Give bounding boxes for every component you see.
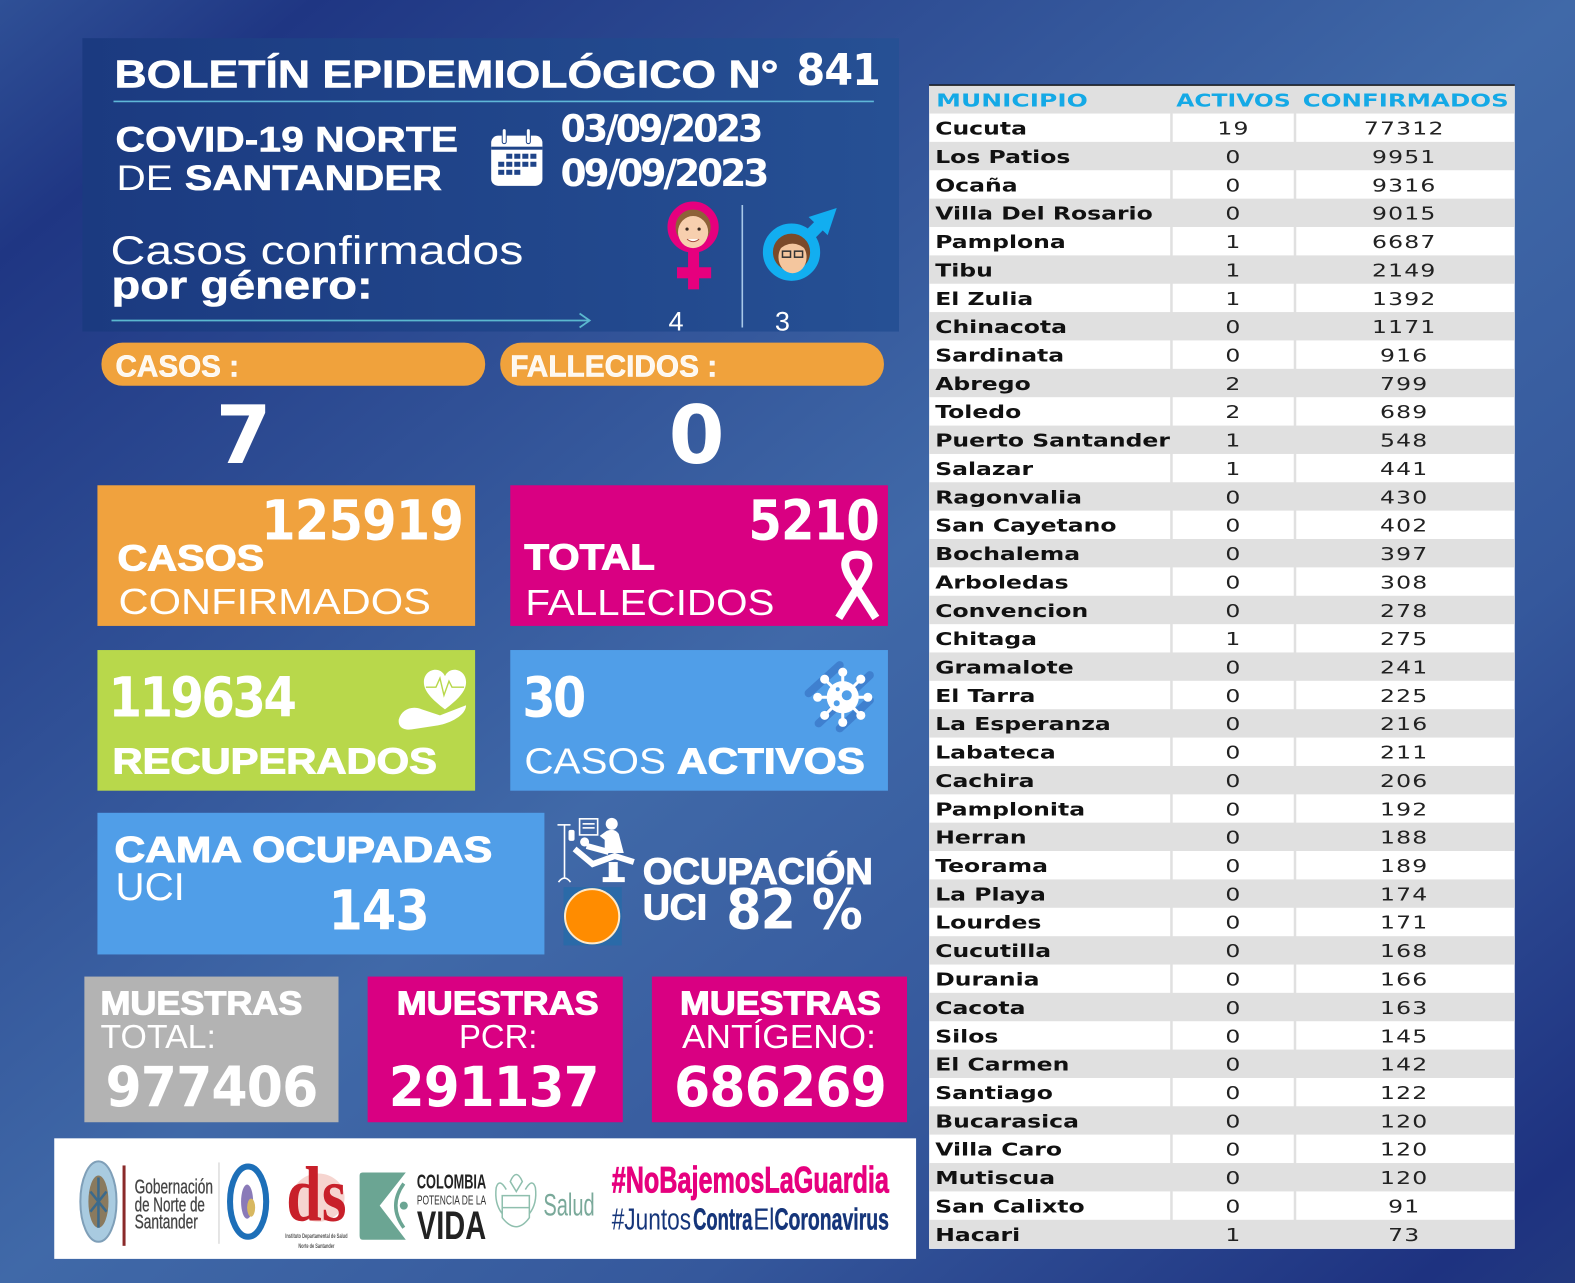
hashtag: juntos contra el coronavirus: [612, 1204, 889, 1237]
table rows: 0: [1225, 147, 1242, 167]
card: muestras antigeno: 686269: [674, 1056, 886, 1120]
ICU occupancy: 82 %: [726, 878, 862, 942]
logo: colombia potencia de la vida: POTENCIA DE LA: [417, 1193, 486, 1208]
table rows: Chitaga: [935, 629, 1037, 649]
table rows: 241: [1380, 657, 1428, 678]
logo: gobernacion: Gobernación: [135, 1177, 213, 1199]
card: total fallecidos: 5210: [748, 490, 879, 554]
table rows: 0: [1225, 317, 1242, 337]
hashtag: juntos contra el coronavirus: Contra: [693, 1204, 752, 1237]
table rows: 0: [1225, 969, 1242, 990]
table rows: 0: [1225, 1026, 1242, 1047]
table rows: 142: [1380, 1054, 1428, 1075]
table rows: San Calixto: [935, 1196, 1085, 1217]
number: fallecidos: 0: [669, 388, 724, 482]
pill: casos: [101, 343, 485, 386]
table rows: 0: [1225, 1196, 1242, 1217]
table rows: Hacari: [935, 1224, 1020, 1245]
table rows: 275: [1380, 629, 1428, 649]
icon: calendar: [491, 129, 542, 186]
table rows: 163: [1380, 997, 1428, 1018]
logo: salud: Salud: [543, 1188, 595, 1223]
table rows: Labateca: [935, 742, 1056, 763]
table rows: Cachira: [935, 771, 1034, 791]
table rows: 278: [1380, 600, 1428, 621]
table rows: 120: [1380, 1111, 1428, 1132]
logo: coat of arms: [496, 1174, 536, 1227]
table rows: Pamplonita: [935, 799, 1085, 820]
card: camas ocupadas: 143: [328, 879, 429, 943]
card: muestras PCR: MUESTRAS: [397, 986, 599, 1023]
card: muestras PCR: PCR:: [459, 1019, 537, 1056]
card: muestras PCR: 291137: [389, 1056, 599, 1120]
panel: header: [82, 38, 899, 337]
table rows: Santiago: [935, 1083, 1053, 1103]
gender heading: Casos confirmados: [110, 228, 523, 273]
logo strip: [54, 1138, 916, 1259]
table rows: 0: [1225, 771, 1242, 791]
divider: [741, 205, 743, 328]
table rows: 0: [1225, 1111, 1242, 1132]
card: camas ocupadas: CAMA OCUPADAS: [115, 829, 492, 870]
table rows: 0: [1225, 799, 1242, 820]
card: total fallecidos: FALLECIDOS: [525, 582, 774, 623]
table rows: 0: [1225, 657, 1242, 678]
table rows: 0: [1225, 884, 1242, 905]
table rows: 0: [1225, 544, 1242, 564]
table rows: 0: [1225, 1168, 1242, 1188]
table rows: La Esperanza: [935, 714, 1111, 735]
table rows: 397: [1380, 544, 1428, 564]
card: casos confirmados: 125919: [261, 490, 463, 554]
table rows: Convencion: [935, 600, 1088, 621]
pill: casos: CASOS :: [116, 351, 239, 384]
table rows: 19: [1217, 118, 1250, 139]
table rows: 73: [1388, 1224, 1420, 1245]
table rows: 120: [1380, 1139, 1428, 1160]
dates: 03/09/2023: [560, 108, 761, 151]
table rows: [935, 118, 1445, 1245]
table header: MUNICIPIO: [936, 90, 1088, 111]
number: casos: 7: [216, 388, 271, 482]
logo: gobernacion: de Norte de: [135, 1195, 205, 1217]
table rows: 2: [1225, 374, 1242, 394]
card: casos activos: [510, 650, 888, 791]
table rows: 0: [1225, 345, 1242, 366]
table rows: 689: [1380, 402, 1428, 423]
table rows: 120: [1380, 1168, 1428, 1188]
table rows: La Playa: [935, 884, 1046, 905]
table rows: Tibu: [935, 260, 993, 281]
card: casos activos: CASOS: [524, 741, 666, 782]
table rows: Bochalema: [935, 544, 1080, 564]
table rows: 1: [1225, 1224, 1242, 1245]
table rows: 0: [1225, 1054, 1242, 1075]
icon: female: [671, 205, 715, 289]
table rows: 1: [1225, 430, 1242, 451]
table rows: 1392: [1372, 288, 1437, 309]
logo: colombia mark: [360, 1172, 408, 1240]
dates: 09/09/2023: [560, 152, 767, 195]
logo: shield: [80, 1161, 126, 1246]
card: total fallecidos: [510, 485, 888, 626]
gender heading: [110, 228, 523, 307]
table rows: 171: [1380, 912, 1428, 933]
logo: gobernacion: Santander: [135, 1212, 198, 1234]
icon: ICU bed: [557, 818, 634, 882]
table rows: 2: [1225, 402, 1242, 423]
hashtag: juntos contra el coronavirus: El: [753, 1204, 774, 1237]
ICU occupancy: OCUPACIÓN: [643, 850, 873, 892]
table rows: 9951: [1372, 147, 1437, 167]
table rows: 168: [1380, 941, 1428, 961]
card: total fallecidos: TOTAL: [524, 537, 655, 578]
table rows: 188: [1380, 827, 1428, 848]
hashtag: juntos contra el coronavirus: #Juntos: [612, 1204, 691, 1237]
table rows: 441: [1380, 459, 1428, 479]
table rows: Villa Caro: [935, 1139, 1062, 1160]
table rows: 0: [1225, 1139, 1242, 1160]
table rows: 1171: [1372, 317, 1437, 337]
table rows: San Cayetano: [935, 515, 1117, 536]
table header: CONFIRMADOS: [1303, 90, 1509, 111]
card: muestras total: [84, 977, 339, 1122]
logo: colombia potencia de la vida: VIDA: [417, 1203, 486, 1248]
card: recuperados: [97, 650, 475, 791]
table rows: 0: [1225, 685, 1242, 706]
table rows: 216: [1380, 714, 1428, 735]
icon: virus: [809, 665, 872, 728]
table rows: Ocaña: [935, 175, 1018, 196]
table rows: Cucutilla: [935, 941, 1051, 961]
table rows: 402: [1380, 515, 1428, 536]
table rows: Chinacota: [935, 317, 1067, 337]
table rows: Mutiscua: [935, 1168, 1055, 1188]
card: casos confirmados: CASOS: [118, 538, 264, 579]
subtitle: SANTANDER: [185, 159, 442, 198]
subtitle: COVID-19 NORTE: [116, 121, 458, 160]
table rows: Toledo: [935, 402, 1021, 423]
card: casos confirmados: CONFIRMADOS: [119, 581, 431, 622]
card: recuperados: 119634: [108, 666, 295, 730]
table rows: Herran: [935, 827, 1027, 848]
table rows: El Zulia: [935, 288, 1033, 309]
table rows: 0: [1225, 912, 1242, 933]
card: muestras total: MUESTRAS: [100, 986, 302, 1023]
table rows: 1: [1225, 260, 1242, 281]
table rows: El Tarra: [935, 685, 1035, 706]
table rows: 0: [1225, 997, 1242, 1018]
table rows: Durania: [935, 969, 1040, 990]
table rows: Los Patios: [935, 147, 1070, 167]
female count: 4: [668, 306, 684, 337]
table rows: 206: [1380, 771, 1428, 791]
table rows: 0: [1225, 941, 1242, 961]
table rows: 799: [1380, 374, 1428, 394]
table rows: 0: [1225, 714, 1242, 735]
table rows: Arboledas: [935, 572, 1069, 593]
table rows: 9316: [1372, 175, 1437, 196]
table rows: 145: [1380, 1026, 1428, 1047]
table rows: 548: [1380, 430, 1428, 451]
table rows: 1: [1225, 459, 1242, 479]
table rows: 192: [1380, 799, 1428, 820]
table rows: 0: [1225, 175, 1242, 196]
table rows: 0: [1225, 515, 1242, 536]
table rows: 1: [1225, 288, 1242, 309]
traffic light: orange: [564, 887, 622, 945]
table rows: Silos: [935, 1026, 998, 1047]
table rows: 6687: [1372, 232, 1437, 252]
card: recuperados: RECUPERADOS: [113, 741, 437, 782]
table rows: 0: [1225, 572, 1242, 593]
table rows: 1: [1225, 629, 1242, 649]
table rows: 916: [1380, 345, 1428, 366]
table rows: 0: [1225, 203, 1242, 224]
card: casos confirmados: [97, 485, 475, 626]
table rows: 225: [1380, 685, 1428, 706]
table rows: 122: [1380, 1083, 1428, 1103]
table rows: 0: [1225, 742, 1242, 763]
table header: ACTIVOS: [1176, 90, 1291, 111]
ICU occupancy: [643, 850, 873, 942]
table rows: 166: [1380, 969, 1428, 990]
table rows: 430: [1380, 487, 1428, 508]
logo: colombia potencia de la vida: [417, 1172, 486, 1248]
hashtag: no bajemos la guardia: #NoBajemosLaGuardia: [612, 1159, 889, 1201]
table rows: 211: [1380, 742, 1428, 763]
table rows: 174: [1380, 884, 1428, 905]
table rows: Cacota: [935, 997, 1026, 1018]
table rows: Lourdes: [935, 912, 1041, 933]
card: muestras antigeno: MUESTRAS: [680, 986, 881, 1023]
table rows: Pamplona: [935, 232, 1066, 252]
logo: gobernacion: [135, 1177, 213, 1234]
table rows: Abrego: [935, 374, 1031, 394]
table: municipios: [929, 84, 1515, 1249]
table rows: 91: [1388, 1196, 1420, 1217]
logo: ids: ds: [286, 1151, 347, 1238]
table rows: 0: [1225, 600, 1242, 621]
card: camas ocupadas: [97, 813, 544, 954]
icon: heart in hand: [399, 670, 466, 730]
hashtag: juntos contra el coronavirus: Coronavirus: [774, 1204, 889, 1237]
title: BOLETÍN EPIDEMIOLÓGICO N°: [115, 52, 778, 96]
card: muestras total: TOTAL:: [100, 1019, 216, 1056]
logo: colombia potencia de la vida: COLOMBIA: [417, 1172, 486, 1194]
table rows: 0: [1225, 1083, 1242, 1103]
gender heading: por género:: [111, 264, 373, 307]
subtitle: [116, 121, 458, 198]
card: camas ocupadas: UCI: [116, 866, 185, 909]
table rows: Puerto Santander: [935, 430, 1171, 451]
table rows: Villa Del Rosario: [935, 203, 1153, 224]
table rows: El Carmen: [935, 1054, 1069, 1075]
card: muestras PCR: [368, 977, 623, 1122]
card: casos activos: 30: [522, 666, 584, 730]
table rows: Ragonvalia: [935, 487, 1082, 508]
arrow: [111, 313, 590, 328]
pill: fallecidos: [500, 343, 884, 386]
logo: ids: Instituto Departamental de Salud: [285, 1234, 348, 1240]
table rows: 308: [1380, 572, 1428, 593]
table rows: 0: [1225, 827, 1242, 848]
table rows: Sardinata: [935, 345, 1064, 366]
table rows: 0: [1225, 487, 1242, 508]
male count: 3: [775, 306, 790, 337]
table rows: 9015: [1372, 203, 1437, 224]
table rows: Cucuta: [935, 118, 1027, 139]
bulletin number: 841: [797, 46, 880, 96]
dates: [560, 108, 767, 195]
pill: fallecidos: FALLECIDOS :: [510, 351, 717, 384]
card: muestras total: 977406: [105, 1056, 317, 1120]
card: muestras antigeno: ANTÍGENO:: [682, 1019, 876, 1056]
card: casos activos: ACTIVOS: [677, 741, 865, 782]
table rows: 0: [1225, 856, 1242, 876]
table header: [936, 90, 1509, 111]
card: muestras antigeno: [652, 977, 907, 1122]
table rows: 2149: [1372, 260, 1437, 281]
table rows: Bucarasica: [935, 1111, 1079, 1132]
logo: circle seal: [230, 1166, 266, 1237]
subtitle: DE: [117, 159, 173, 198]
table rows: 189: [1380, 856, 1428, 876]
table rows: Gramalote: [935, 657, 1074, 678]
icon: male: [768, 208, 837, 276]
icon: ribbon: [839, 555, 876, 618]
ICU occupancy: UCI: [643, 886, 707, 927]
logo: ids: Norte de Santander: [298, 1244, 335, 1250]
table rows: Teorama: [935, 856, 1048, 876]
table rows: 77312: [1364, 118, 1445, 139]
table rows: 1: [1225, 232, 1242, 252]
table rows: Salazar: [935, 459, 1034, 479]
